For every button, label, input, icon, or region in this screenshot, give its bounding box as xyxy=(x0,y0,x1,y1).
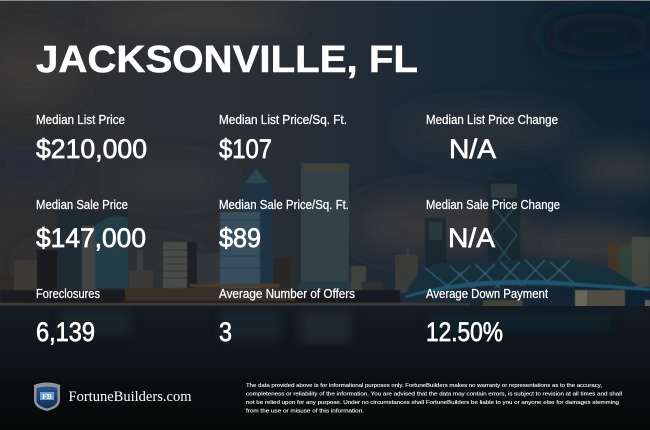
stat: average down payment xyxy=(426,287,548,347)
stat: average number of offers xyxy=(219,287,355,347)
stat: median sale price per sq ft xyxy=(219,198,349,253)
background: Jacksonville skyline xyxy=(0,163,650,318)
stat: median sale price change: Median Sale Price Change xyxy=(426,198,560,212)
logo: FortuneBuilders xyxy=(34,382,192,411)
stat: median sale price per sq ft: $89 xyxy=(219,223,261,253)
stat: median list price change: Median List Price Change xyxy=(426,113,558,127)
stat: foreclosures xyxy=(36,287,100,347)
disclaimer: from the use or misuse of this information. xyxy=(246,408,364,414)
stat: average down payment: 12.50% xyxy=(426,317,503,347)
icon: shield: FB xyxy=(42,392,52,401)
disclaimer xyxy=(246,383,622,414)
stat: median sale price: $147,000 xyxy=(36,223,146,253)
stat: median list price change xyxy=(426,113,558,164)
background: sky xyxy=(0,0,650,310)
stat: median sale price: Median Sale Price xyxy=(36,198,128,212)
stat: median sale price per sq ft: Median Sale Price/Sq. Ft. xyxy=(219,198,349,212)
title: JACKSONVILLE, FL xyxy=(36,39,418,81)
stat: median sale price change xyxy=(426,198,560,253)
disclaimer: completeness or reliability of the information. You are advised that the data may contain errors, is subject to revision at all times and shall xyxy=(246,392,622,398)
disclaimer: The data provided above is for informational purposes only. FortuneBuilders makes no warranty or representations as to the accuracy, xyxy=(246,383,602,389)
bridge xyxy=(405,181,650,318)
stat: median sale price xyxy=(36,198,146,253)
disclaimer: not be relied upon for any purpose. Under no circumstances shall FortuneBuilders be liable to you or anyone else for damages stemming xyxy=(246,400,619,406)
stat: median list price xyxy=(36,113,147,164)
stat: median sale price change: N/A xyxy=(448,223,495,253)
background: river and footer shading xyxy=(0,306,650,430)
stat: median list price per sq ft xyxy=(219,113,347,164)
stat: average number of offers: 3 xyxy=(219,317,232,347)
stat: median list price: Median List Price xyxy=(36,113,125,127)
stat: average down payment: Average Down Payment xyxy=(426,287,548,301)
stat: average number of offers: Average Number of Offers xyxy=(219,287,355,301)
stat: median list price per sq ft: Median List Price/Sq. Ft. xyxy=(219,113,347,127)
stat: foreclosures: Foreclosures xyxy=(36,287,100,301)
stat: median list price change: N/A xyxy=(449,134,496,164)
wordmark: FortuneBuilders.com xyxy=(68,389,192,405)
stat: foreclosures: 6,139 xyxy=(36,317,95,347)
stat: median list price: $210,000 xyxy=(36,134,147,164)
icon: shield xyxy=(34,382,60,411)
stat: median list price per sq ft: $107 xyxy=(219,134,272,164)
